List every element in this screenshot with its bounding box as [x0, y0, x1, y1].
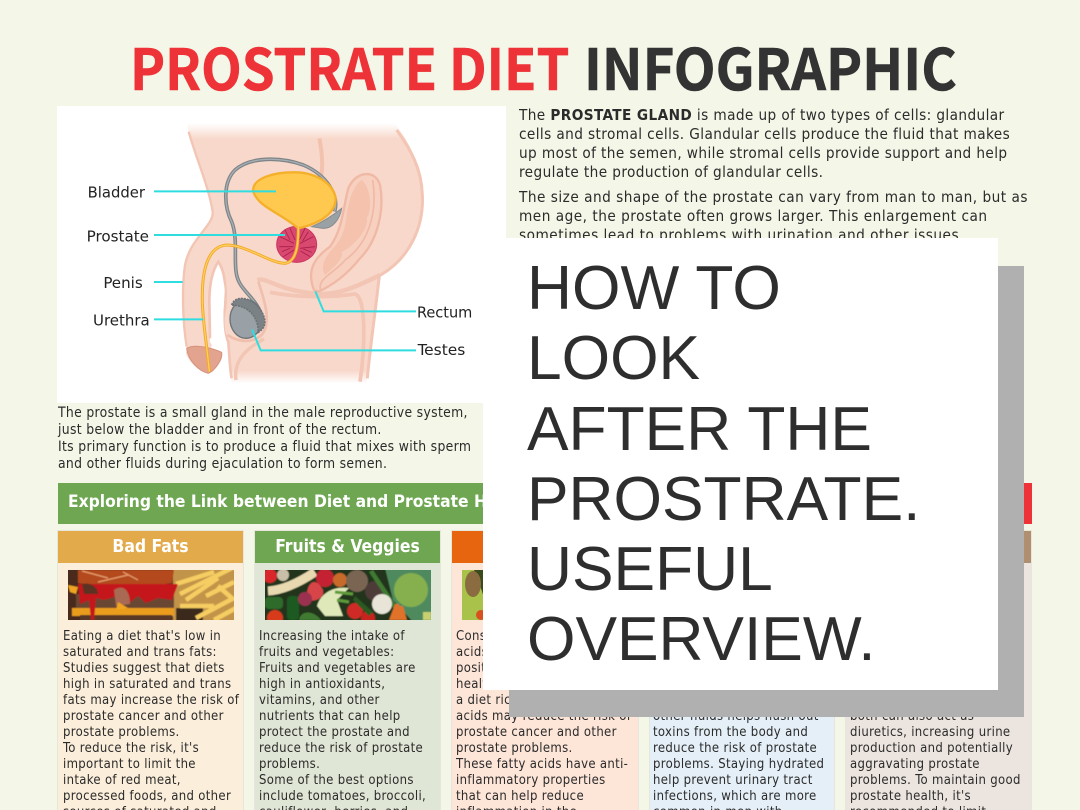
text: alcohol and caffeine: production and potentially [850, 741, 1013, 756]
text: hydration: help prevent urinary tract [653, 773, 813, 788]
text block: prostate description: Its primary function is to produce a fluid that mixes with sperm [58, 439, 471, 455]
text block: gland cells: cells and stromal cells. Glandular cells produce the fluid that makes [519, 125, 1010, 143]
panel: healthy fats [451, 530, 639, 810]
ureter [319, 138, 322, 184]
text block: prostate description: The prostate is a small gland in the male reproductive system, [58, 405, 468, 421]
text: bad fats: prostate problems. [63, 725, 180, 740]
diagram labels: Urethra [93, 311, 150, 329]
panel: alcohol and caffeine [845, 530, 1032, 810]
title [130, 25, 957, 107]
diagram labels: Bladder [88, 184, 145, 202]
urethra [202, 227, 298, 372]
text: alcohol and caffeine: aggravating prostate [850, 757, 980, 772]
panel: anatomy diagram [57, 106, 506, 403]
diagram labels: Prostate [87, 228, 149, 246]
text: healthy fats: prostate cancer and other [456, 725, 617, 740]
text: fruits and veggies: Increasing the intake of [259, 629, 405, 644]
overlay headline: USEFUL [527, 535, 773, 604]
text: fruits and veggies: protect the prostate and [259, 725, 410, 740]
text: healthy fats: prostate problems. [456, 741, 573, 756]
text: alcohol and caffeine: both can also act as [850, 709, 974, 724]
overlay headline: PROSTRATE. [527, 465, 920, 534]
text: hydration: infections, which are more [653, 789, 817, 804]
text: fruits and veggies: reduce the risk of prostate [259, 741, 423, 756]
text block: gland cells: up most of the semen, while stromal cells provide support and help [519, 144, 1008, 162]
panel: hydration [649, 530, 835, 810]
text: fruits and veggies: fruits and vegetables: [259, 645, 394, 660]
text: fruits and veggies: Fruits and vegetables are [259, 661, 416, 676]
text: healthy fats: a diet rich in omega-3 fatty [456, 693, 625, 708]
text: healthy fats: that can help reduce [456, 789, 584, 804]
heading bar: alcohol and caffeine [845, 531, 1032, 563]
body silhouette [183, 123, 423, 385]
text: healthy fats: acids can have a [456, 645, 560, 660]
label lines [154, 191, 416, 350]
text: bad fats: Studies suggest that diets [63, 661, 225, 676]
heading: fruits and veggies: Fruits & Veggies [275, 537, 420, 557]
text: fruits and veggies: problems. [259, 757, 320, 772]
text: hydration: reduce the risk of prostate [653, 741, 817, 756]
text: bad fats: saturated and trans fats: [63, 645, 217, 660]
diagram labels: Testes [417, 341, 465, 359]
text: fruits and veggies: vitamins, and other [259, 693, 380, 708]
seminal vesicle [312, 208, 342, 228]
text: fruits and veggies: include tomatoes, broccoli, [259, 789, 426, 804]
heading: bad fats [57, 531, 244, 563]
text: healthy fats: positive impact on prostate [456, 661, 625, 676]
text: alcohol and caffeine: problems. To maintain good [850, 773, 1021, 788]
text block: gland cells [518, 106, 1010, 181]
section banner: red end [800, 483, 1032, 524]
text block: prostate size: The size and shape of the prostate can vary from man to man, but as [519, 188, 1028, 206]
text: bad fats: intake of red meat, [63, 773, 181, 788]
text block: prostate size [518, 188, 1028, 244]
text: fruits and veggies: high in antioxidants, [259, 677, 385, 692]
text: fruits and veggies [259, 629, 426, 810]
title: dark part: INFOGRAPHIC [584, 25, 957, 107]
text: healthy fats: Consuming omega-3 fatty [456, 629, 616, 644]
text: hydration [653, 709, 824, 810]
overlay headline: LOOK [527, 324, 700, 393]
text block: gland cells: The PROSTATE GLAND is made up of two types of cells: glandular [519, 106, 1005, 124]
overlay headline [527, 254, 920, 674]
text: bad fats: important to limit the [63, 757, 196, 772]
text block: gland cells: regulate the production of glandular cells. [519, 163, 823, 181]
text: healthy fats [456, 629, 631, 810]
overlay shadow [509, 266, 1024, 717]
prostate [277, 226, 317, 262]
panel: bad fats [57, 530, 244, 810]
rectum [311, 174, 381, 292]
heading: bad fats: Bad Fats [112, 537, 189, 557]
text: bad fats: Eating a diet that's low in [63, 629, 221, 644]
heading bar: healthy fats [451, 531, 639, 563]
overlay headline: AFTER THE [527, 395, 872, 464]
panel: fruits and veggies [254, 530, 441, 810]
image: vegetables [265, 570, 431, 620]
diagram labels: Rectum [417, 304, 472, 322]
text: bad fats: prostate cancer and other [63, 709, 224, 724]
text: hydration: problems. Staying hydrated [653, 757, 824, 772]
text: alcohol and caffeine [850, 709, 1021, 810]
text: healthy fats: inflammatory properties [456, 773, 606, 788]
text: bad fats [62, 629, 240, 810]
text: healthy fats: acids may reduce the risk of [456, 709, 631, 724]
diagram labels: Penis [103, 274, 143, 292]
text: alcohol and caffeine: prostate health, it's [850, 789, 971, 804]
image: avocado [462, 570, 483, 620]
text: alcohol and caffeine: diuretics, increasing urine [850, 725, 1010, 740]
text: bad fats: processed foods, and other [63, 789, 231, 804]
overlay: headline card [483, 238, 998, 690]
text block: prostate description [58, 405, 471, 472]
vas deferens [226, 159, 336, 318]
text block: prostate size: sometimes lead to problems with urination and other issues. [519, 226, 964, 244]
text block: prostate description: just below the bladder and in front of the rectum. [58, 422, 382, 438]
text: bad fats: To reduce the risk, it's [63, 741, 199, 756]
text: fruits and veggies: Some of the best options [259, 773, 414, 788]
heading: fruits and veggies [254, 531, 441, 563]
text: bad fats: high in saturated and trans [63, 677, 231, 692]
testis [230, 298, 265, 338]
text: bad fats: fats may increase the risk of [63, 693, 239, 708]
title: red part: PROSTRATE DIET [130, 25, 569, 107]
bladder [253, 172, 336, 228]
text: healthy fats: These fatty acids have anti- [456, 757, 628, 772]
overlay headline: HOW TO [527, 254, 781, 323]
section banner: diet and prostate health: Exploring the Link between Diet and Prostate Health [68, 492, 532, 512]
text: hydration: other fluids helps flush out [653, 709, 819, 724]
overlay headline: OVERVIEW. [527, 605, 876, 674]
image: burger and fries [68, 570, 234, 620]
diagram labels [87, 184, 472, 359]
text: fruits and veggies: nutrients that can help [259, 709, 401, 724]
text block: prostate size: men age, the prostate often grows larger. This enlargement can [519, 207, 988, 225]
text: hydration: toxins from the body and [653, 725, 808, 740]
text block: prostate description: and other fluids during ejaculation to form semen. [58, 456, 387, 472]
text: healthy fats: health. Studies suggest [456, 677, 601, 692]
section banner: diet and prostate health [58, 483, 1032, 524]
